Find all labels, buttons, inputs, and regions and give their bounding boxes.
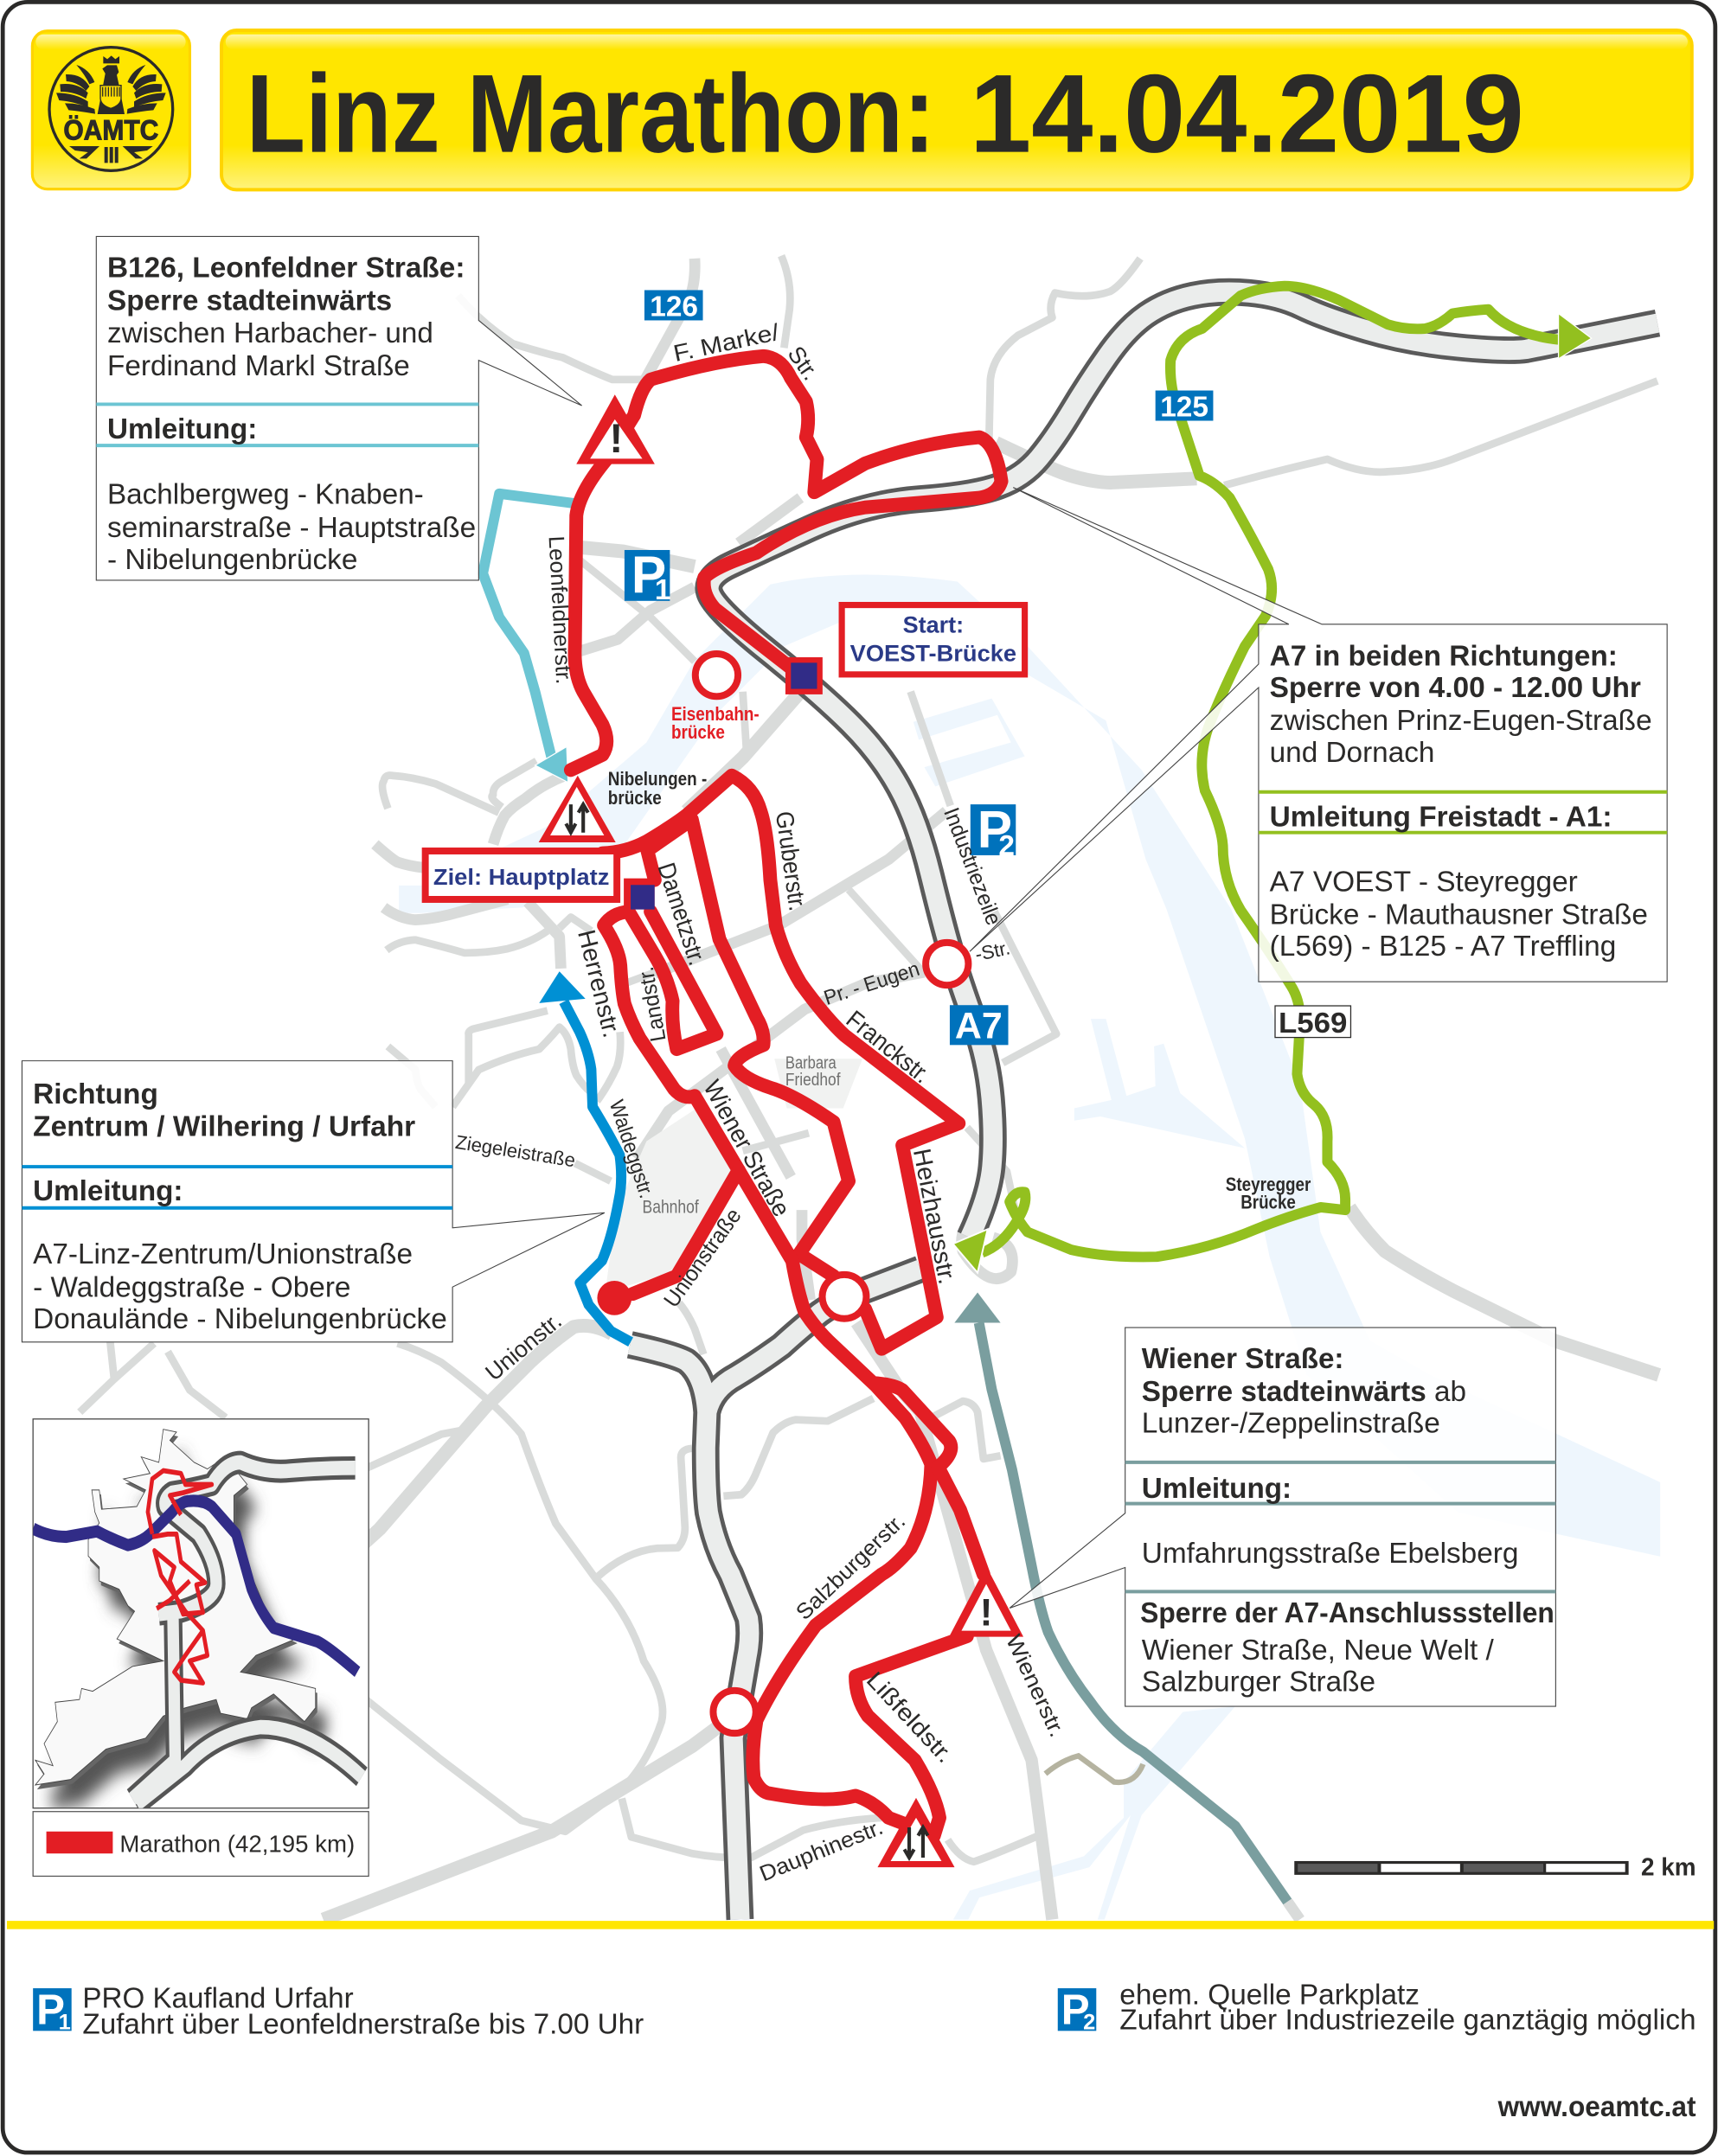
street labels: Unionstr. <box>480 1308 567 1385</box>
panel: Richtung Zentrum: A7-Linz-Zentrum/Unionstraße <box>33 1238 413 1270</box>
footer divider <box>7 1921 1714 1929</box>
street labels: brücke <box>608 787 662 809</box>
parking sign: P1: 1 <box>655 574 670 606</box>
inset shadow <box>47 1454 326 1810</box>
heading: A7 in beiden Richtungen: <box>1270 641 1618 673</box>
street labels: Unionstraße <box>659 1204 747 1312</box>
street labels: Gruberstr. <box>770 809 811 913</box>
arrow: green to A7 <box>953 1229 988 1273</box>
street labels: Herrenstr. <box>572 927 625 1040</box>
street labels: Franckstr. <box>841 1006 935 1089</box>
panel: A7 in beiden Richtungen <box>970 488 1667 982</box>
parking sign: P1: P <box>631 545 666 604</box>
street labels: Salzburgerstr. <box>792 1509 910 1625</box>
footer: P1: Zufahrt über Leonfeldnerstraße bis 7.00 Uhr <box>82 2008 644 2040</box>
street labels: Nibelungen - <box>608 768 707 790</box>
motorway A7 <box>630 292 1657 1920</box>
warning sign: Wiener Straße <box>949 1566 1023 1637</box>
street labels: F. Marke/ <box>671 319 782 367</box>
label box: Ziel <box>426 851 617 899</box>
panel: Richtung Zentrum: Zentrum / Wilhering / Urfahr <box>33 1110 415 1142</box>
street labels: Waldeggstr. <box>605 1097 658 1201</box>
logo badge <box>32 31 189 189</box>
street labels: Steyregger <box>1226 1174 1311 1195</box>
parking sign: P2: 2 <box>998 830 1015 862</box>
detour: khaki link <box>1045 1756 1143 1782</box>
inset lower edge <box>37 1434 317 1789</box>
detour route: teal (Umfahrung Ebelsberg) <box>954 1293 1287 1902</box>
panel: Richtung Zentrum: Umleitung: <box>33 1175 183 1207</box>
street labels: Wiener Straße <box>697 1076 795 1221</box>
panel: A7 in beiden Richtungen: A7 VOEST - Steyregger <box>1270 866 1578 898</box>
footer: P1: 1 <box>59 2011 71 2035</box>
panel: A7 in beiden Richtungen: Sperre von 4.00 - 12.00 Uhr <box>1270 672 1641 704</box>
title: Linz Marathon: <box>247 52 935 176</box>
street labels: Lißfeldstr. <box>862 1667 958 1768</box>
panel: A7 in beiden Richtungen: Brücke - Mauthausner Straße <box>1270 899 1648 931</box>
inset land <box>35 1430 316 1785</box>
detour route: green (Freistadt - A1) <box>953 286 1592 1273</box>
road badge: 125: 125 <box>1160 392 1208 424</box>
inset motorways <box>132 1462 362 1804</box>
street labels: Str. <box>783 342 824 385</box>
inset marathon route <box>148 1471 212 1683</box>
legend: marathon: Marathon (42,195 km) <box>119 1831 355 1858</box>
street labels: Eisenbahn- <box>671 703 760 725</box>
footer: P2: 2 <box>1083 2011 1095 2035</box>
street labels: Bahnhof <box>643 1196 699 1217</box>
road badge: L569: L569 <box>1279 1008 1347 1040</box>
legend: marathon <box>33 1812 369 1876</box>
street labels: Wienerstr. <box>1001 1631 1069 1741</box>
footer: P2 <box>1058 1979 1696 2037</box>
panel: A7 in beiden Richtungen: Umleitung Freistadt - A1: <box>1270 802 1612 834</box>
scale bar <box>1294 1854 1696 1882</box>
panel: B126 Leonfeldner Straße: Umleitung: <box>107 413 257 445</box>
panel: A7 in beiden Richtungen: zwischen Prinz-Eugen-Straße <box>1270 705 1652 737</box>
road network (grey background) <box>80 256 1659 1920</box>
panel: Wiener Straße: Wiener Straße, Neue Welt / <box>1142 1635 1495 1667</box>
panel: B126 Leonfeldner Straße: seminarstraße - Hauptstraße <box>107 512 476 544</box>
two-way sign: Dauphinestraße <box>877 1798 955 1867</box>
road badge: A7: A7 <box>955 1005 1003 1046</box>
panel: A7 in beiden Richtungen: (L569) - B125 - A7 Treffling <box>1270 931 1616 963</box>
panel: A7 in beiden Richtungen: und Dornach <box>1270 737 1434 769</box>
arrow: teal <box>954 1293 1001 1323</box>
ÖAMTC eagle emblem: ÖAMTC <box>63 114 158 146</box>
arrow: cyan <box>535 746 568 783</box>
footer: P1 <box>33 1982 644 2040</box>
footer: P1: PRO Kaufland Urfahr <box>82 1982 354 2014</box>
scale bar: 2 km <box>1641 1854 1696 1882</box>
detour route: blue (Waldeggstraße) <box>539 971 631 1342</box>
warning sign: Leonfeldner Straße: ! <box>609 416 623 462</box>
panel: Wiener Straße <box>1010 1328 1555 1706</box>
Barbara Friedhof area <box>774 1059 862 1108</box>
panel: Richtung Zentrum: - Waldeggstraße - Obere <box>33 1271 350 1303</box>
start dot: Unionstraße <box>597 1281 631 1315</box>
street labels: Ziegeleistraße <box>454 1131 577 1171</box>
panel: Richtung Zentrum <box>22 1061 605 1342</box>
Bahnhof area <box>606 1107 734 1293</box>
start marker square <box>788 660 820 692</box>
two-way sign: Nibelungenbrücke <box>539 776 616 842</box>
footer: P1: P <box>36 1986 65 2033</box>
panel: B126 Leonfeldner Straße: zwischen Harbacher- und <box>107 317 433 349</box>
street labels: brücke <box>671 721 725 743</box>
website: www.oeamtc.at <box>1497 2091 1696 2123</box>
heading: Wiener Straße: <box>1142 1343 1344 1375</box>
label box: Start: Start: <box>903 611 964 637</box>
panel: B126 Leonfeldner Straße: Bachlbergweg - Knaben- <box>107 479 424 511</box>
arrow: blue <box>539 971 586 1003</box>
footer: P2: Zufahrt über Industriezeile ganztägig möglich <box>1119 2005 1696 2037</box>
street labels: Friedhof <box>785 1070 841 1090</box>
panel: B126 Leonfeldner Straße <box>96 236 582 580</box>
road badge: 126: 126 <box>650 291 698 323</box>
panel: B126 Leonfeldner Straße: Sperre stadteinwärts <box>107 285 392 317</box>
label box: Start <box>842 605 1025 675</box>
street labels: Brücke <box>1240 1192 1296 1213</box>
heading: B126, Leonfeldner Straße: <box>107 252 465 284</box>
ÖAMTC eagle emblem <box>49 48 173 170</box>
label box: Ziel: Ziel: Hauptplatz <box>433 864 609 890</box>
street labels: Heizhausstr. <box>907 1147 961 1287</box>
panel: Wiener Straße: Salzburger Straße <box>1142 1667 1375 1699</box>
roundabouts (closed junctions) <box>696 654 968 1733</box>
title <box>247 52 1524 176</box>
street labels: Pr. - Eugen <box>821 957 922 1010</box>
street labels: -Str. <box>973 937 1012 965</box>
parking sign: P2: P <box>978 799 1012 858</box>
title: 14.04.2019 <box>970 52 1524 176</box>
panel: Wiener Straße: Umleitung: <box>1142 1473 1292 1505</box>
footer: P2: ehem. Quelle Parkplatz <box>1119 1979 1420 2011</box>
panel: Wiener Straße: Sperre stadteinwärts ab <box>1142 1376 1466 1408</box>
street labels <box>454 319 1311 1886</box>
panel: Wiener Straße: Umfahrungsstraße Ebelsberg <box>1142 1538 1518 1570</box>
finish marker square <box>624 879 655 910</box>
arrow: green north-east <box>1559 314 1592 359</box>
street labels: Leonfeldnerstr. <box>543 535 575 685</box>
heading: Richtung <box>33 1078 158 1110</box>
label box: Start: VOEST-Brücke <box>850 641 1016 667</box>
overview inset map <box>33 1419 369 1810</box>
panel: Richtung Zentrum: Donaulände - Nibelungenbrücke <box>33 1303 447 1335</box>
title bar <box>221 30 1692 189</box>
street labels: Industriezeile <box>939 804 1006 929</box>
river Danube (pale background) <box>399 575 1660 1920</box>
footer: P2: P <box>1061 1986 1090 2033</box>
street labels: Dametzstr. <box>651 860 711 969</box>
inset Danube <box>33 1500 357 1672</box>
street labels: Landstr. <box>634 965 671 1044</box>
panel: B126 Leonfeldner Straße: Ferdinand Markl Straße <box>107 350 410 382</box>
street labels: Barbara <box>785 1052 837 1072</box>
warning sign: Wiener Straße: ! <box>980 1591 992 1634</box>
warning sign: Leonfeldner Straße <box>576 394 655 464</box>
panel: Wiener Straße: Lunzer-/Zeppelinstraße <box>1142 1408 1440 1440</box>
panel: B126 Leonfeldner Straße: - Nibelungenbrücke <box>107 544 357 576</box>
marathon route (red) <box>571 356 1002 1836</box>
detour route: cyan (Leonfeldner Straße) <box>483 494 574 783</box>
street labels: Dauphinestr. <box>756 1815 887 1886</box>
panel: Wiener Straße: Sperre der A7-Anschlussstellen <box>1140 1597 1555 1629</box>
